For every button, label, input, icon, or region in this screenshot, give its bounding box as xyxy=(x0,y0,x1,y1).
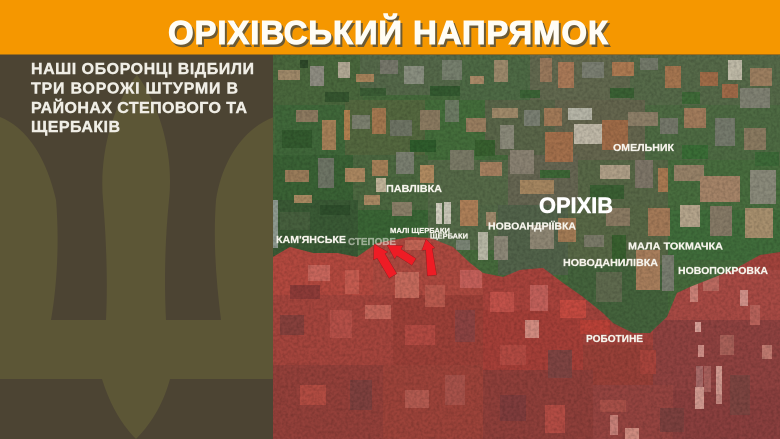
label: Mala Tokmachka: МАЛА ТОКМАЧКА xyxy=(628,242,723,252)
label: Kamianske: КАМ'ЯНСЬКЕ xyxy=(276,235,346,246)
description text xyxy=(31,61,254,136)
label: Pavlivka: ПАВЛІВКА xyxy=(386,184,442,195)
label: Mali Shcherbaky: МАЛІ ЩЕРБАКИ xyxy=(390,226,450,235)
map fields: occupied territory in red xyxy=(273,235,780,439)
description text: ТРИ ВОРОЖІ ШТУРМИ В xyxy=(31,80,238,98)
map fields: unoccupied territory xyxy=(273,55,780,335)
title: ОРІХІВСЬКИЙ НАПРЯМОК xyxy=(170,16,611,54)
red attack arrows xyxy=(373,239,437,278)
description text: ЩЕРБАКІВ xyxy=(31,119,120,136)
label: Novopokrovka: НОВОПОКРОВКА xyxy=(678,266,768,277)
label: Robotyne: РОБОТИНЕ xyxy=(586,334,643,345)
arrow: toward Mali Shcherbaky xyxy=(387,245,416,265)
label: Omelnyk: ОМЕЛЬНИК xyxy=(613,143,675,154)
description text: НАШІ ОБОРОНЦІ ВІДБИЛИ xyxy=(31,61,254,78)
label: Novodanylivka: НОВОДАНИЛІВКА xyxy=(563,258,658,269)
header bar xyxy=(0,0,780,54)
map texture xyxy=(273,55,780,439)
label: Novoandriivka: НОВОАНДРІЇВКА xyxy=(488,220,576,232)
description text: РАЙОНАХ СТЕПОВОГО ТА xyxy=(31,98,247,117)
arrow: toward Shcherbaky xyxy=(422,239,437,276)
title: ОРІХІВСЬКИЙ НАПРЯМОК xyxy=(168,13,609,51)
arrow: toward Stepove xyxy=(373,244,397,278)
label: Orikhiv: ОРІХІВ xyxy=(539,193,613,218)
label: Stepove: СТЕПОВЕ xyxy=(348,237,396,248)
label: Shcherbaky: ЩЕРБАКИ xyxy=(430,234,468,240)
left panel with trident emblem xyxy=(0,55,274,439)
map labels xyxy=(276,143,768,345)
satellite map xyxy=(273,55,780,439)
